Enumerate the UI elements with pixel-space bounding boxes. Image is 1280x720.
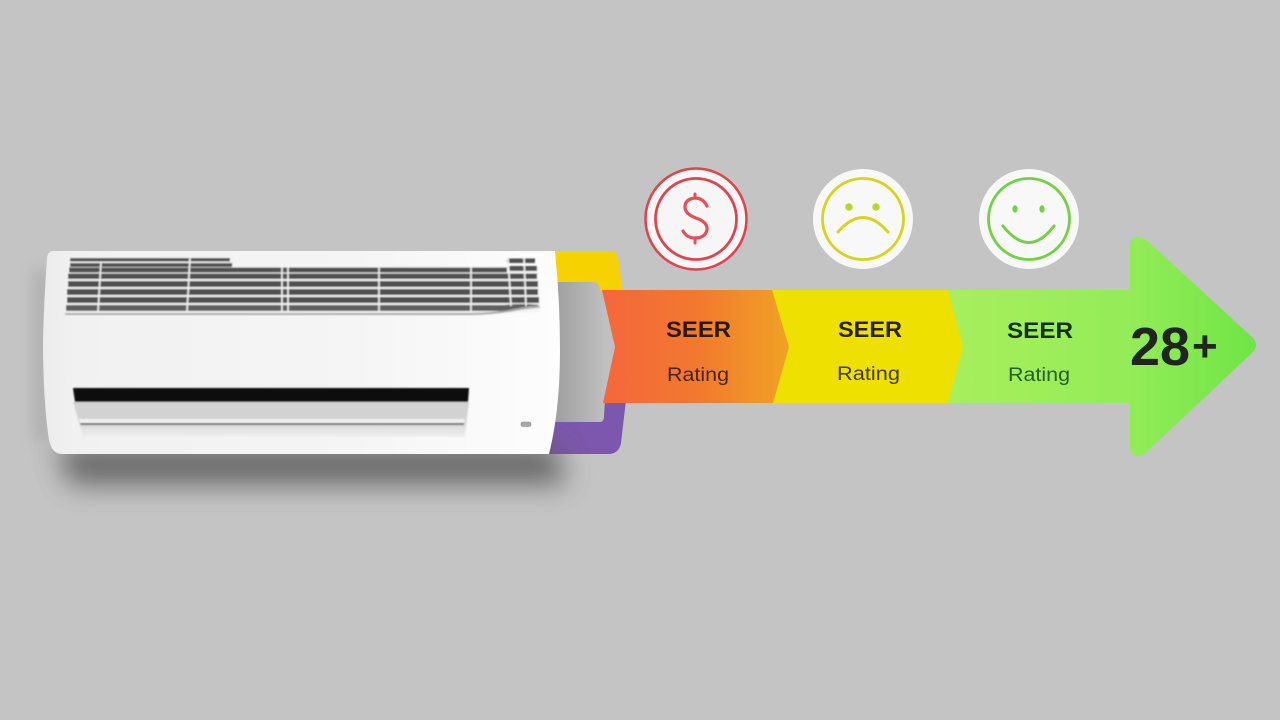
label: first rating segment [666,317,731,386]
shaded gap between unit and arrow [555,282,617,424]
louver highlight [79,419,465,423]
unit shadow [56,446,566,484]
yellow bracket [553,251,623,292]
label: second rating segment [837,317,902,385]
icon: dollar sign [646,168,746,270]
purple bracket [546,400,626,454]
label: third rating segment [1007,318,1073,386]
rating scale arrow [602,237,1256,456]
label: 28+ top rating: 28 [1130,317,1190,377]
label: third rating segment: Rating [1008,365,1070,386]
grille base line [65,306,540,315]
label: first rating segment: Rating [667,365,729,386]
icon: sad face [813,169,913,269]
outlet recess [73,402,469,437]
label: 28+ top rating: + [1192,322,1218,371]
arrow segment: green [940,237,1256,456]
unit left edge shade [36,270,48,440]
air conditioner unit [36,251,566,484]
unit body [43,251,560,454]
label: third rating segment: SEER [1007,318,1073,343]
status light [521,422,531,426]
louver lower edge [80,423,464,425]
label: second rating segment: SEER [838,317,902,342]
arrow segment: yellow [765,290,963,403]
top air grille [65,257,540,316]
arrow segment: orange [602,290,789,403]
lowest grille slat [66,304,539,311]
icon: happy face [979,169,1079,269]
outlet dark opening [73,388,469,402]
grille dividers [98,258,526,312]
connector brackets behind the unit [546,251,626,454]
grille frame [65,257,540,316]
louver blade [75,402,468,419]
lower air outlet [73,388,469,437]
grille slats [67,258,539,303]
label: 28+ top rating [1130,317,1218,377]
label: first rating segment: SEER [666,317,731,342]
label: second rating segment: Rating [837,364,900,385]
